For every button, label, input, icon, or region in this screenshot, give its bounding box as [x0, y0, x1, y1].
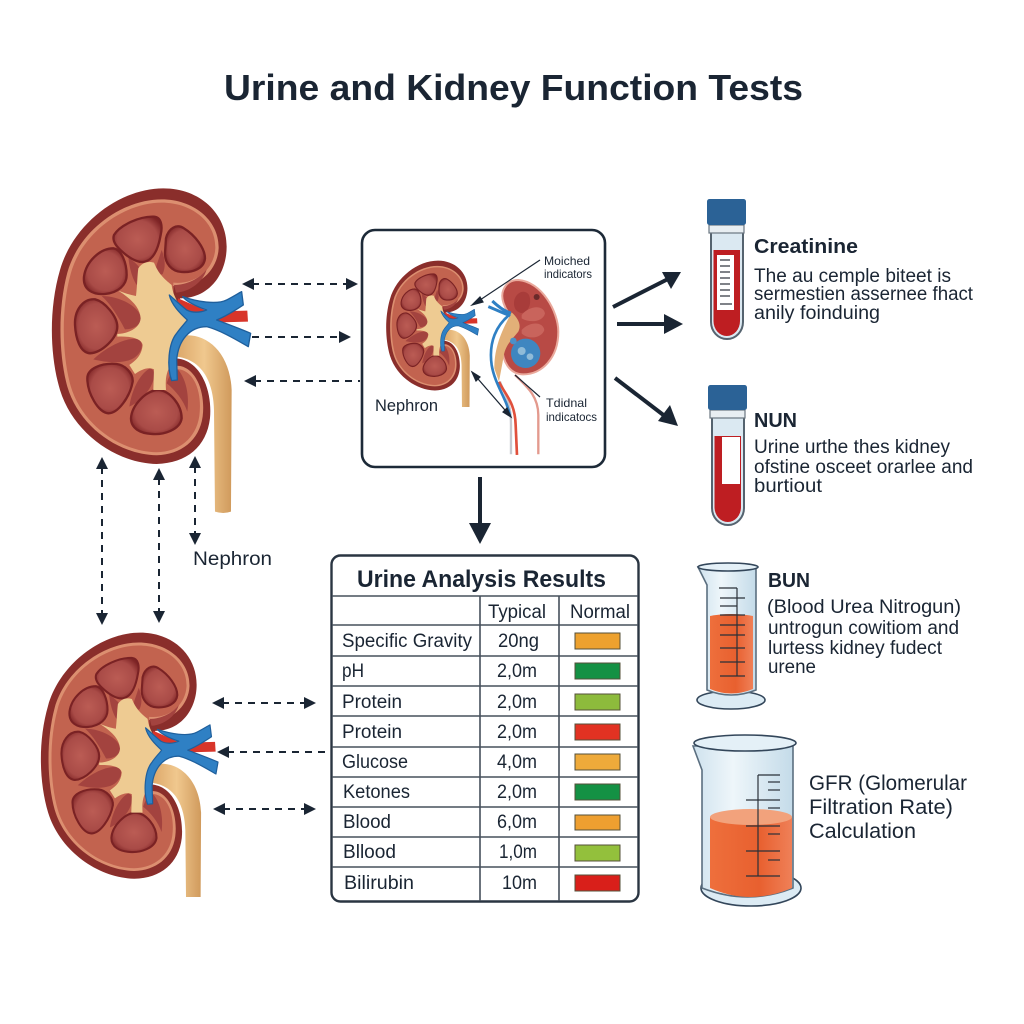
- text block: Creatinine: The au cemple biteet is: [754, 266, 951, 287]
- text block: GFR: GFR (Glomerular: [809, 772, 967, 795]
- text block: Creatinine: Creatinine: [754, 236, 858, 258]
- table row labels: Bilirubin: [344, 873, 414, 894]
- table row labels: Blood: [343, 812, 391, 833]
- arrow: panel to table: [469, 477, 491, 544]
- table row labels: Protein: [342, 692, 402, 713]
- table colour swatches: [575, 633, 620, 891]
- icon: BUN measuring cylinder: [697, 563, 765, 709]
- text block: NUN: burtiout: [754, 476, 823, 497]
- panel text: Moiched indicators: indicators: [544, 267, 592, 281]
- title: Urine and Kidney Function Tests: [224, 67, 803, 108]
- arrows: vertical links between kidneys: [96, 456, 201, 625]
- text block: GFR: [809, 772, 967, 843]
- table grid: [332, 596, 638, 901]
- text block: NUN: Urine urthe thes kidney: [754, 437, 950, 458]
- panel text: Tdidnal indicators: Tdidnal: [546, 396, 587, 410]
- panel kidney: diseased with vessels: [488, 280, 558, 455]
- panel kidney: healthy: [386, 261, 479, 414]
- text block: GFR: Calculation: [809, 820, 916, 843]
- table row labels: Bllood: [343, 842, 396, 863]
- table values: 10m: [502, 873, 537, 894]
- panel text: Tdidnal indicators: indicatocs: [546, 410, 597, 424]
- table values: [497, 631, 539, 894]
- table values: 2,0m: [497, 661, 537, 682]
- text block: BUN: (Blood Urea Nitrogun): [767, 597, 961, 618]
- icon: creatinine blood tube: [707, 199, 746, 339]
- text block: BUN: untrogun cowitiom and: [768, 618, 959, 639]
- panel text: Tdidnal indicators: [546, 396, 597, 424]
- text block: BUN: [767, 570, 961, 678]
- table title: Urine Analysis Results: [357, 566, 606, 593]
- text block: NUN: NUN: [754, 410, 797, 432]
- table row labels: [342, 631, 472, 894]
- text block: NUN: [754, 410, 973, 497]
- table row labels: pH: [342, 661, 364, 682]
- table: urine analysis results: [332, 556, 638, 902]
- panel text: Nephron: Nephron: [375, 396, 438, 415]
- table values: 6,0m: [497, 812, 537, 833]
- small kidney illustration: [41, 633, 218, 922]
- table values: 4,0m: [497, 752, 537, 773]
- text block: Creatinine: sermestien assernee fhact: [754, 284, 974, 305]
- panel: nephron detail: [362, 230, 605, 467]
- icon: GFR beaker: [693, 735, 801, 906]
- text block: NUN: ofstine osceet orarlee and: [754, 457, 973, 478]
- text block: BUN: urene: [768, 657, 816, 678]
- text block: BUN: lurtess kidney fudect: [768, 638, 943, 659]
- table values: 20ng: [498, 631, 539, 652]
- arrows: large kidney to nephron panel: [242, 278, 360, 387]
- large kidney illustration: [52, 188, 251, 513]
- text block: Creatinine: [754, 236, 974, 324]
- panel text: Moiched indicators: Moiched: [544, 254, 590, 268]
- arrows: small kidney to table: [212, 697, 330, 815]
- label: Nephron: Nephron: [193, 549, 272, 570]
- text block: GFR: Filtration Rate): [809, 796, 953, 819]
- table column headers: Typical: [488, 602, 546, 623]
- table column headers: Normal: [570, 602, 630, 623]
- table values: 2,0m: [497, 782, 537, 803]
- table row labels: Ketones: [343, 782, 410, 803]
- table values: 2,0m: [497, 692, 537, 713]
- table values: 1,0m: [499, 842, 537, 863]
- panel callout lines: [472, 260, 540, 417]
- text block: BUN: BUN: [768, 570, 810, 592]
- table row labels: Specific Gravity: [342, 631, 472, 652]
- icon: NUN blood tube: [708, 385, 747, 525]
- arrows: panel to blood tests: [613, 272, 683, 426]
- table values: 2,0m: [497, 722, 537, 743]
- table row labels: Glucose: [342, 752, 408, 773]
- panel text: Moiched indicators: [544, 254, 592, 281]
- table row labels: Protein: [342, 722, 402, 743]
- text block: Creatinine: anily foinduing: [754, 303, 880, 324]
- table column headers: [488, 602, 630, 623]
